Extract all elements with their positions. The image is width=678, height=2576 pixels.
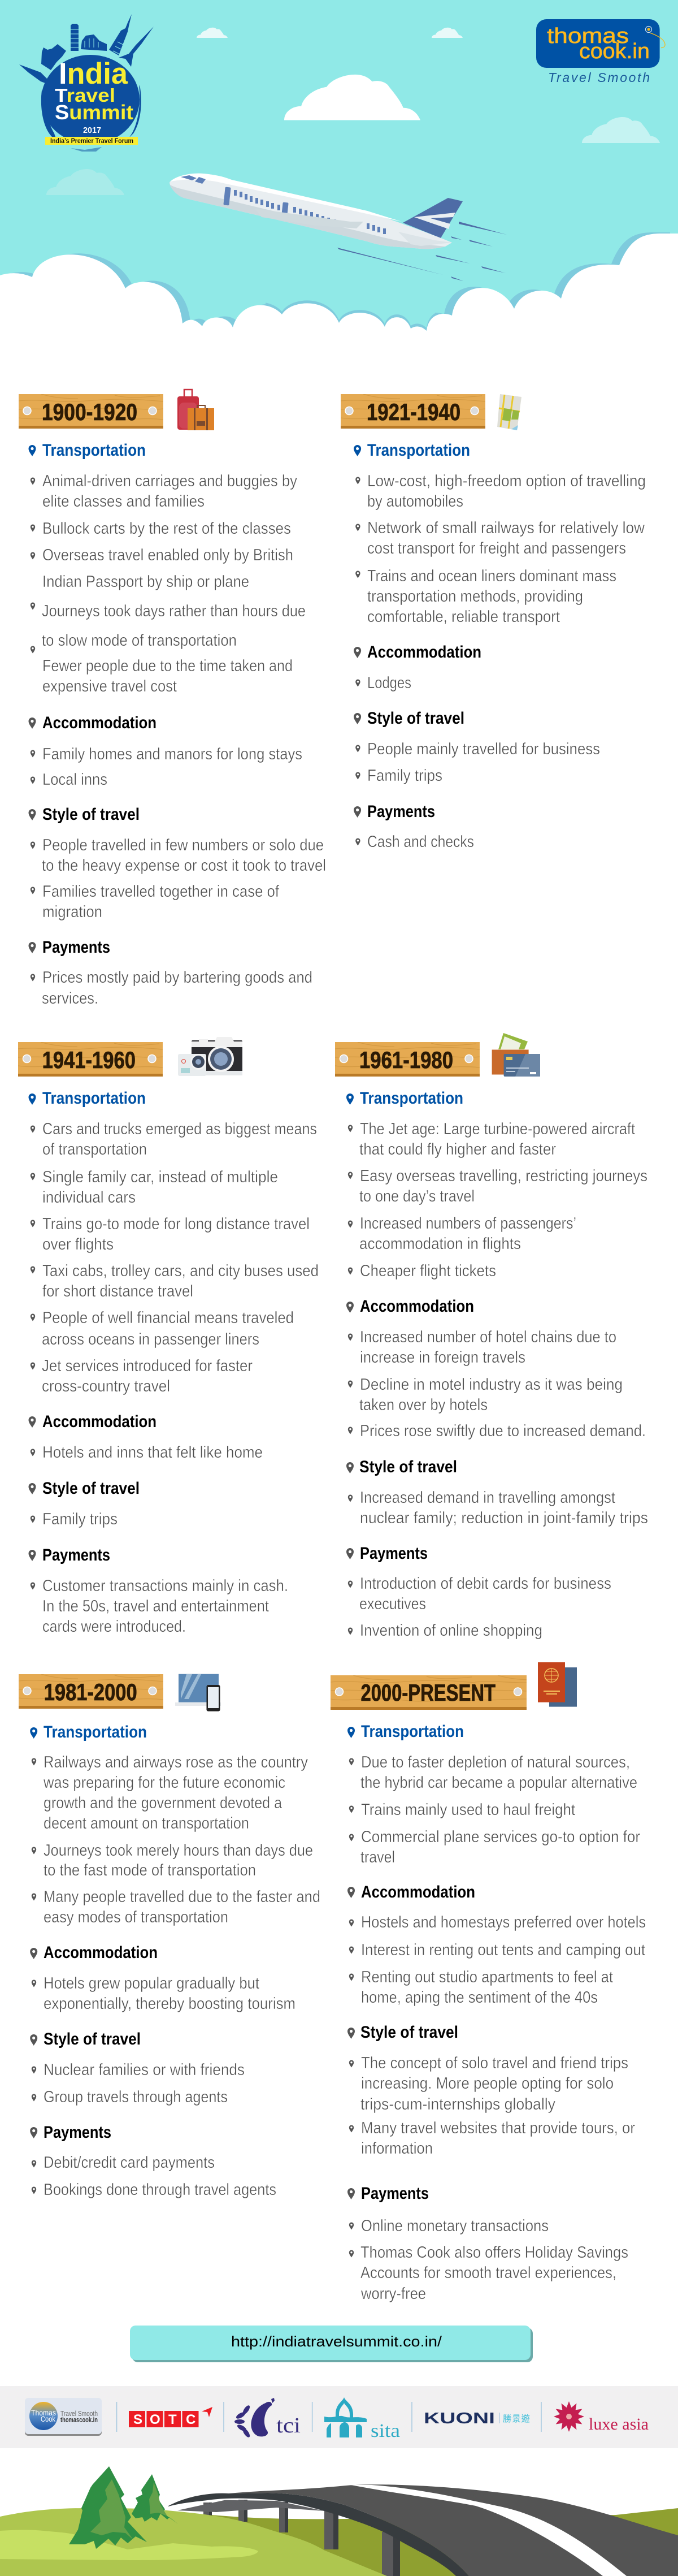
text: cook.in: cook.in xyxy=(579,40,650,63)
logo: Thomas Cook tag: Cook xyxy=(41,2414,56,2423)
back hill xyxy=(212,2508,678,2576)
list: transportation: Taxi cabs, trolley cars, and city buses used xyxy=(42,1262,319,1280)
list: accommodation: Hotels and inns that felt like home xyxy=(42,1443,263,1462)
list: transportation: to one day’s travel xyxy=(359,1187,475,1205)
list: transportation: Trains go-to mode for long distance travel xyxy=(42,1215,310,1233)
heading: Style of travel: Style of travel xyxy=(44,2030,141,2048)
list: accommodation: Interest in renting out tents and camping out xyxy=(361,1941,645,1959)
list: style of travel: trips-cum-internships globally xyxy=(360,2095,555,2113)
list: accommodation: Family homes and manors for long stays xyxy=(42,745,302,763)
list: accommodation xyxy=(355,674,411,692)
list: accommodation: Lodges xyxy=(367,674,411,692)
logo: Thomas Cook tag: thomascook.in xyxy=(60,2415,98,2424)
list: transportation: Journeys took days rather than hours due xyxy=(42,602,306,620)
heading: Style of travel: Style of travel xyxy=(360,2023,458,2042)
list: transportation: Fewer people due to the time taken and xyxy=(42,657,293,675)
plank: 1961-1980 xyxy=(335,1042,480,1077)
list: accommodation: Hostels and homestays preferred over hotels xyxy=(361,1913,646,1931)
list: transportation: to slow mode of transportation xyxy=(42,632,237,650)
list: style of travel: increasing. More people opting for solo xyxy=(361,2074,614,2093)
list: transportation xyxy=(349,1753,640,1866)
logo: thomascook.in xyxy=(536,19,665,85)
list: transportation: cross-country travel xyxy=(42,1377,170,1395)
list: accommodation xyxy=(349,1913,646,2007)
logo: SOTC: T xyxy=(168,2412,177,2427)
text: Travel Smooth: Travel Smooth xyxy=(548,70,650,85)
list: style of travel xyxy=(355,740,600,785)
icon: passports xyxy=(538,1662,577,1707)
tail fin xyxy=(403,198,463,238)
heading: Accommodation: Accommodation xyxy=(42,714,157,732)
tagline bar: India’s Premier Travel Forum xyxy=(50,138,133,145)
list: style of travel xyxy=(32,2061,245,2106)
heading: Transportation: Transportation xyxy=(360,1089,463,1108)
text: India: India xyxy=(59,57,128,90)
list: style of travel: Many travel websites that provide tours, or xyxy=(361,2119,635,2137)
heading: Payments: Payments xyxy=(361,2184,429,2203)
logo: tci peacock: tci xyxy=(276,2414,301,2437)
panel: 1941-1960 xyxy=(18,1037,319,1636)
logo: sita xyxy=(324,2397,400,2441)
heading: Style of travel: Style of travel xyxy=(367,709,464,728)
logo: KUONI: 勝景遊 xyxy=(503,2414,530,2424)
list: payments: executives xyxy=(359,1595,426,1613)
icon: world landmarks xyxy=(19,14,154,152)
list: payments xyxy=(348,1575,611,1640)
tree: back xyxy=(132,2474,178,2524)
logo: SOTC xyxy=(129,2407,212,2427)
list: style of travel: to the heavy expense or cost it took to travel xyxy=(42,857,326,875)
list: payments: Accounts for smooth travel experiences, xyxy=(360,2264,616,2282)
plank: 1941-1960: 1941-1960 xyxy=(42,1047,136,1073)
text: 2017: 2017 xyxy=(83,126,101,135)
list: transportation: growth and the government devoted a xyxy=(44,1794,282,1812)
front hill xyxy=(0,2508,387,2576)
list: transportation: Trains mainly used to haul freight xyxy=(361,1801,575,1819)
list: style of travel: Increased demand in travelling amongst xyxy=(360,1489,615,1507)
panel: partner logos xyxy=(0,2386,678,2448)
list: transportation: Due to faster depletion of natural sources, xyxy=(361,1753,630,1771)
list: style of travel: Group travels through agents xyxy=(44,2088,228,2106)
light hill patch xyxy=(0,2530,258,2560)
list: payments: worry-free xyxy=(360,2285,426,2303)
logo: SOTC: O xyxy=(150,2412,160,2427)
cloud shadow xyxy=(11,232,670,331)
list: style of travel: migration xyxy=(42,903,102,921)
list: accommodation: Decline in motel industry as it was being xyxy=(360,1376,623,1394)
panel: 1961-1980 xyxy=(335,1033,648,1640)
heading: Accommodation: Accommodation xyxy=(367,643,481,662)
heading: Accommodation: Accommodation xyxy=(42,1412,157,1431)
list: accommodation: exponentially, thereby boosting tourism xyxy=(44,1995,295,2013)
list: payments: Invention of online shopping xyxy=(360,1622,542,1640)
list: transportation: for short distance travel xyxy=(42,1282,193,1300)
list: accommodation xyxy=(32,1974,295,2013)
list: style of travel: nuclear family; reduction in joint-family trips xyxy=(360,1509,648,1527)
plank: 1981-2000: 1981-2000 xyxy=(44,1679,137,1705)
list: payments xyxy=(349,2217,628,2303)
list: transportation: decent amount on transportation xyxy=(44,1814,249,1832)
heading: Payments: Payments xyxy=(42,1546,110,1564)
icon: small cloud right xyxy=(432,28,463,38)
list: transportation: Network of small railways for relatively low xyxy=(367,519,645,537)
rear stabiliser xyxy=(398,232,452,246)
road centre stripe xyxy=(351,2485,627,2576)
wing xyxy=(255,209,363,228)
list: transportation: Journeys took merely hours than days due xyxy=(44,1842,313,1860)
list: transportation: Overseas travel enabled only by British xyxy=(42,546,293,564)
button: website link xyxy=(130,2326,533,2362)
list: accommodation xyxy=(31,745,302,789)
list: transportation: to the fast mode of transportation xyxy=(44,1861,256,1879)
heading: Accommodation: Accommodation xyxy=(361,1883,475,1901)
icon: small cloud left xyxy=(197,28,228,38)
heading: Style of travel: Style of travel xyxy=(42,805,140,824)
list: transportation: Trains and ocean liners dominant mass xyxy=(367,567,616,585)
list: style of travel: People travelled in few numbers or solo due xyxy=(42,836,324,854)
list: transportation: travel xyxy=(360,1848,395,1866)
list: transportation: Bullock carts by the rest of the classes xyxy=(42,520,291,538)
logo: Thomas Cook tag xyxy=(25,2398,102,2436)
panel: 1921-1940 xyxy=(341,394,646,851)
list: payments: Customer transactions mainly in cash. xyxy=(42,1577,288,1595)
divider lines xyxy=(117,2402,541,2432)
logo: KUONI: KUONI xyxy=(424,2409,495,2427)
list: transportation: elite classes and families xyxy=(42,492,205,511)
text: Travel: Travel xyxy=(55,85,115,106)
list: transportation: individual cars xyxy=(42,1188,136,1207)
heading: Transportation: Transportation xyxy=(361,1722,464,1741)
plank: 1900-1920: 1900-1920 xyxy=(42,399,137,425)
icon: cameras xyxy=(178,1037,242,1076)
list: accommodation xyxy=(348,1328,646,1440)
list: transportation: Cars and trucks emerged as biggest means xyxy=(42,1120,317,1138)
text: Summit: Summit xyxy=(55,101,133,124)
logo: KUONI xyxy=(424,2409,530,2427)
list: style of travel: Nuclear families or with friends xyxy=(44,2061,245,2079)
list: transportation: comfortable, reliable transport xyxy=(367,608,560,626)
list: transportation: expensive travel cost xyxy=(42,677,177,695)
list: transportation: accommodation in flights xyxy=(359,1235,521,1253)
panel: 1900-1920 xyxy=(19,390,326,1008)
heading: Payments: Payments xyxy=(42,938,110,957)
list: transportation: Easy overseas travelling, restricting journeys xyxy=(360,1167,647,1185)
heading: Payments: Payments xyxy=(360,1544,428,1563)
button: website link: http://indiatravelsummit.co.in/ xyxy=(231,2333,442,2350)
plank: 1941-1960 xyxy=(18,1042,163,1077)
logo: sita: sita xyxy=(371,2421,400,2441)
logo: SOTC: C xyxy=(186,2412,195,2427)
list: transportation: that could fly higher and faster xyxy=(359,1140,556,1159)
list: transportation: of transportation xyxy=(42,1140,147,1159)
list: transportation: Railways and airways rose as the country xyxy=(44,1753,308,1771)
heading: Transportation: Transportation xyxy=(367,441,470,460)
list: transportation: The Jet age: Large turbine-powered aircraft xyxy=(360,1120,635,1138)
list: transportation: cost transport for freight and passengers xyxy=(367,539,626,557)
list: style of travel: Family trips xyxy=(42,1510,118,1528)
icon: map xyxy=(497,394,521,430)
list: transportation: the hybrid car became a popular alternative xyxy=(360,1774,637,1792)
list: transportation xyxy=(31,1120,319,1395)
list: payments: cards were introduced. xyxy=(42,1618,186,1636)
list: style of travel xyxy=(31,836,326,921)
plank: 1921-1940: 1921-1940 xyxy=(367,399,460,425)
list: payments xyxy=(31,1577,288,1636)
logo: Thomas Cook tag: Thomas xyxy=(31,2408,56,2417)
logo: Thomas Cook tag: Travel Smooth xyxy=(60,2409,98,2418)
logo: tci peacock xyxy=(234,2398,301,2439)
list: accommodation: Increased number of hotel chains due to xyxy=(360,1328,616,1346)
plank: 1981-2000 xyxy=(19,1674,163,1709)
list: accommodation: Prices rose swiftly due to increased demand. xyxy=(360,1422,646,1440)
cabin windows xyxy=(223,187,386,234)
icon: tag ring and string xyxy=(645,26,665,48)
list: transportation xyxy=(31,472,306,695)
heading: Transportation: Transportation xyxy=(42,441,146,460)
panel: 2000-present xyxy=(331,1662,646,2303)
list: transportation: People of well financial means traveled xyxy=(42,1309,294,1327)
plank: 2000-PRESENT: 2000-PRESENT xyxy=(360,1679,496,1706)
list: transportation: easy modes of transportation xyxy=(44,1908,228,1926)
heading: Accommodation: Accommodation xyxy=(360,1297,474,1316)
list: transportation: across oceans in passenger liners xyxy=(42,1330,259,1348)
illustration: cloud bank xyxy=(0,232,678,339)
heading: Transportation: Transportation xyxy=(44,1723,147,1741)
list: transportation: Low-cost, high-freedom option of travelling xyxy=(367,472,646,490)
logo: luxe asia: luxe asia xyxy=(589,2415,649,2434)
list: style of travel: People mainly travelled for business xyxy=(367,740,600,758)
list: payments: Prices mostly paid by bartering goods and xyxy=(42,969,312,987)
list: transportation: Commercial plane services go-to option for xyxy=(361,1828,640,1846)
list: transportation: Cheaper flight tickets xyxy=(360,1262,496,1280)
list: transportation: by automobiles xyxy=(367,492,463,511)
list: transportation xyxy=(32,1753,320,1926)
panel: 1981-2000 xyxy=(19,1674,320,2199)
icon: luggage xyxy=(177,390,214,430)
list: style of travel xyxy=(349,2054,635,2158)
list: payments xyxy=(32,2154,276,2199)
plank: 1961-1980: 1961-1980 xyxy=(359,1047,453,1073)
icon: big white cloud xyxy=(284,75,420,120)
list: accommodation: Hotels grew popular gradually but xyxy=(44,1974,259,1992)
plank: 1900-1920 xyxy=(19,394,163,429)
list: transportation: over flights xyxy=(42,1235,114,1254)
illustration: airplane xyxy=(169,174,507,281)
icon: landmark details xyxy=(71,29,123,54)
header: sky background xyxy=(0,0,678,339)
list: accommodation: taken over by hotels xyxy=(359,1396,488,1414)
list: transportation: Indian Passport by ship or plane xyxy=(42,573,249,591)
list: transportation xyxy=(348,1120,647,1280)
heading: Payments: Payments xyxy=(367,802,435,821)
heading: Payments: Payments xyxy=(44,2123,111,2142)
logo: SOTC: S xyxy=(133,2412,142,2427)
fuselage xyxy=(169,174,452,249)
fuselage belly xyxy=(169,184,445,249)
list: payments: services. xyxy=(42,989,98,1008)
icon: pale cloud right xyxy=(582,117,660,143)
list: style of travel: information xyxy=(361,2140,433,2158)
list: transportation: was preparing for the future economic xyxy=(43,1774,285,1792)
list: style of travel xyxy=(348,1489,648,1527)
text: thomas: thomas xyxy=(547,24,629,48)
cloud white xyxy=(0,234,678,396)
heading: Style of travel: Style of travel xyxy=(359,1458,457,1476)
plank: 1921-1940 xyxy=(341,394,485,429)
list: payments: Cash and checks xyxy=(367,833,474,851)
list: transportation: Animal-driven carriages and buggies by xyxy=(42,472,297,490)
fuselage top highlight xyxy=(171,174,402,222)
bridge pillars xyxy=(203,2500,400,2576)
icon: wallet and card xyxy=(492,1033,540,1077)
list: accommodation: Local inns xyxy=(42,771,107,789)
illustration: landscape xyxy=(0,2466,678,2576)
cockpit windows xyxy=(181,175,206,184)
road side band xyxy=(168,2493,469,2576)
list: transportation: Increased numbers of passengers’ xyxy=(360,1214,576,1233)
list: transportation: transportation methods, providing xyxy=(367,587,583,606)
list: style of travel: The concept of solo travel and friend trips xyxy=(361,2054,628,2072)
list: accommodation: home, aping the sentiment of the 40s xyxy=(361,1989,598,2007)
heading: Style of travel: Style of travel xyxy=(42,1479,140,1498)
list: payments: Thomas Cook also offers Holiday Savings xyxy=(360,2244,628,2262)
list: transportation xyxy=(355,472,646,626)
tree: front xyxy=(69,2466,147,2549)
speed lines xyxy=(337,222,507,281)
list: payments: In the 50s, travel and entertainment xyxy=(42,1597,269,1615)
pillar shadows xyxy=(209,2500,400,2576)
list: style of travel: Family trips xyxy=(367,767,442,785)
logo: luxe asia xyxy=(554,2401,649,2434)
list: transportation: Jet services introduced for faster xyxy=(42,1357,253,1375)
list: accommodation: Renting out studio apartments to feel at xyxy=(361,1968,613,1986)
icon: laptop and tablet xyxy=(175,1674,221,1711)
heading: Transportation: Transportation xyxy=(42,1089,146,1108)
logo: India Travel Summit 2017 xyxy=(19,14,154,152)
list: transportation: Single family car, instead of multiple xyxy=(42,1168,278,1186)
bridge underside xyxy=(177,2500,324,2512)
list: payments xyxy=(31,969,312,1008)
list: payments: Debit/credit card payments xyxy=(44,2154,215,2172)
heading: Accommodation: Accommodation xyxy=(44,1943,158,1962)
list: accommodation: increase in foreign travels xyxy=(360,1348,525,1367)
list: payments: Introduction of debit cards for business xyxy=(360,1575,611,1593)
plank: 2000-PRESENT xyxy=(331,1675,527,1710)
list: transportation: Many people travelled due to the faster and xyxy=(44,1888,320,1906)
list: payments: Bookings done through travel agents xyxy=(44,2181,276,2199)
icon: pale cloud left xyxy=(46,169,124,195)
list: payments: Online monetary transactions xyxy=(361,2217,549,2235)
list: style of travel: Families travelled together in case of xyxy=(42,883,280,901)
road surface xyxy=(229,2484,678,2576)
